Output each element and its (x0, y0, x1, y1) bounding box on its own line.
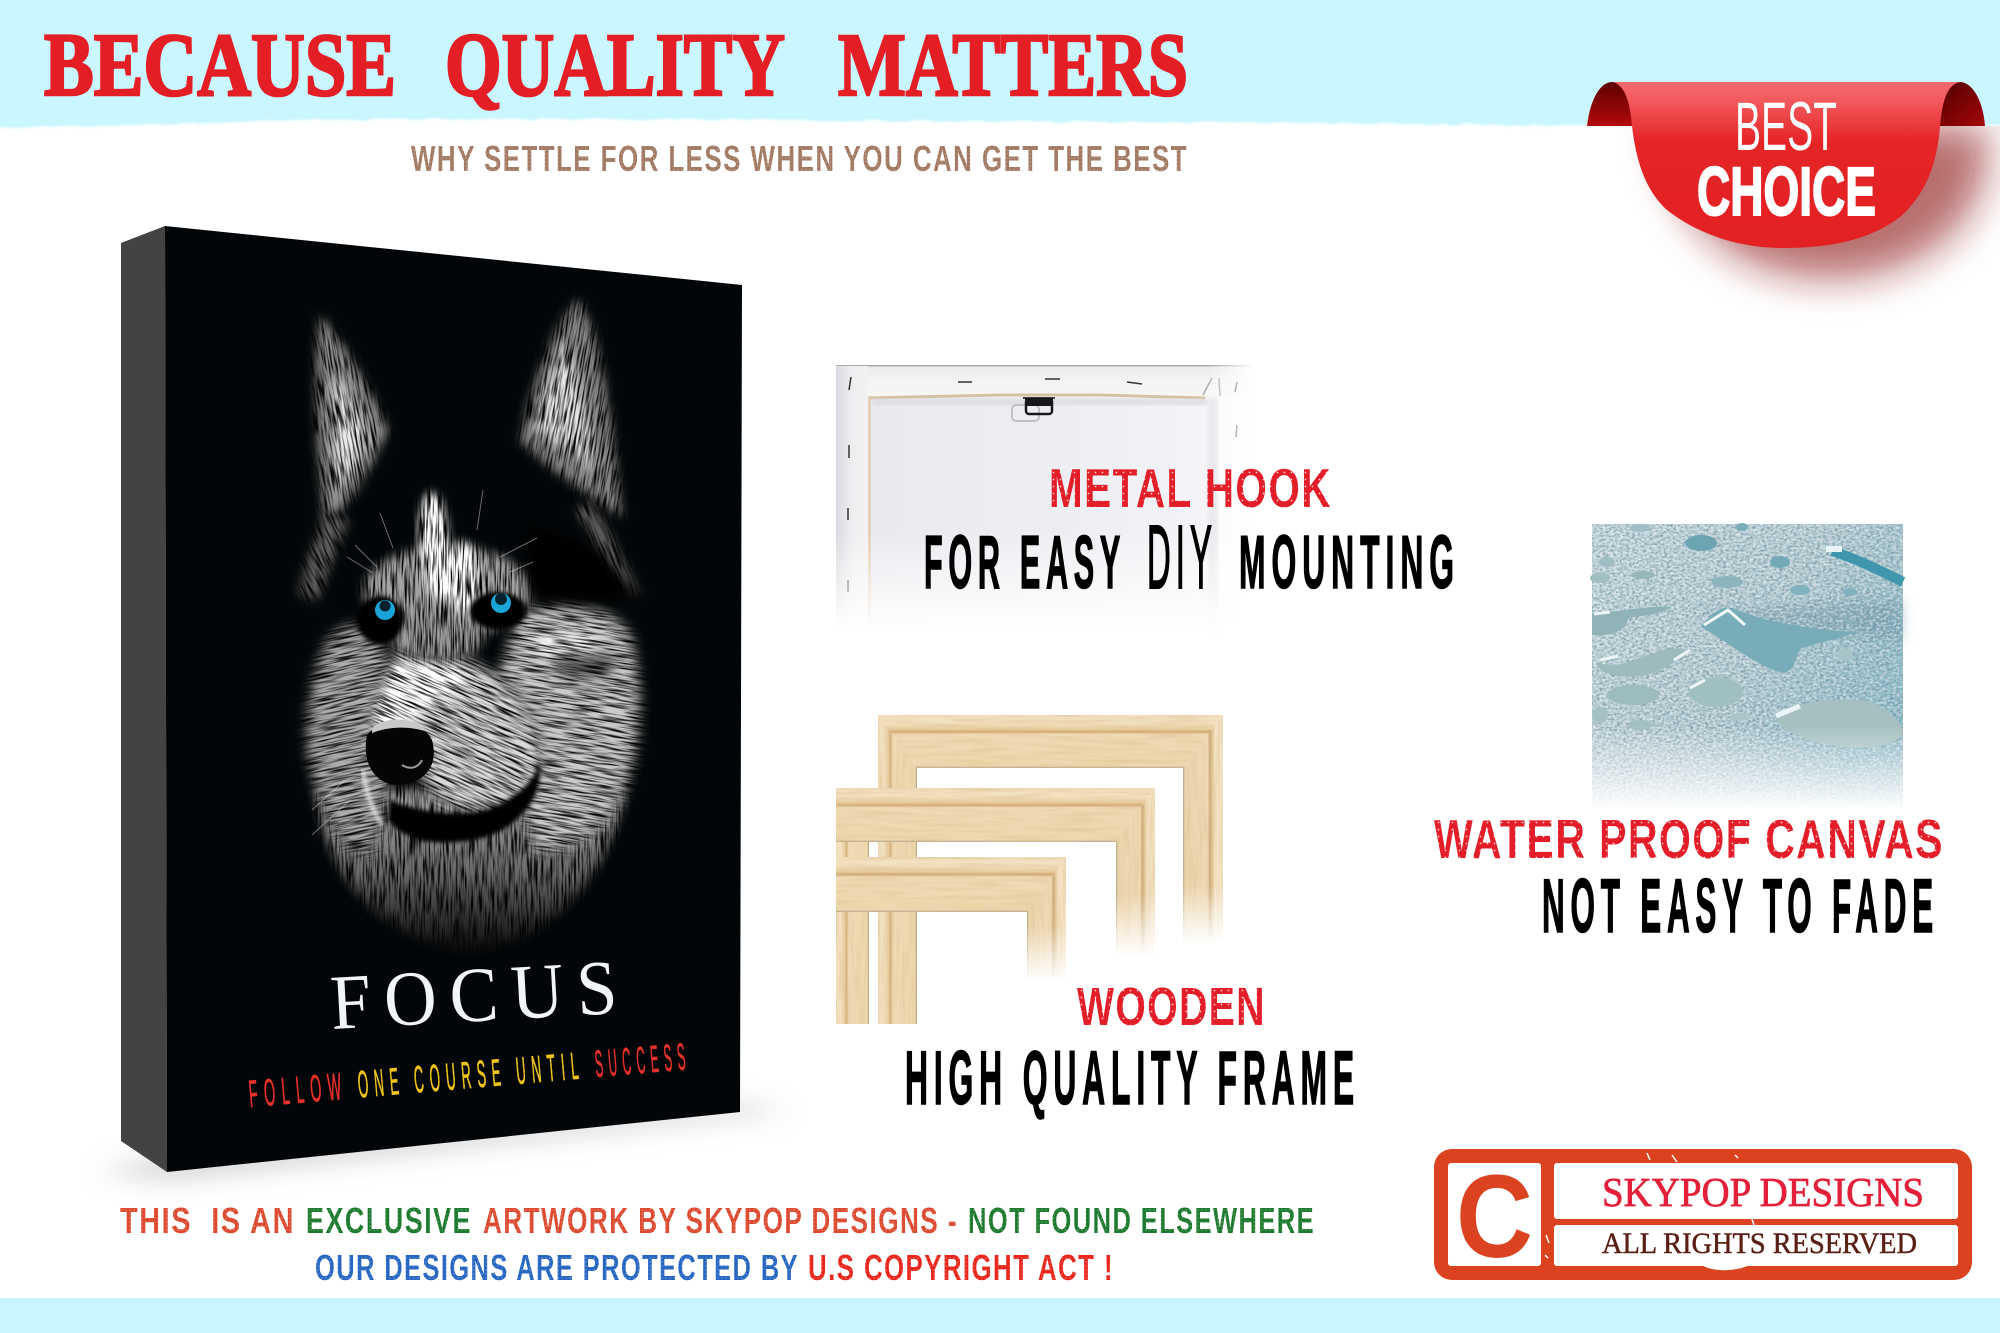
title: MATTERS (838, 16, 1188, 115)
wooden frames photo (836, 715, 1227, 1024)
mouth (363, 758, 540, 843)
text: HIGH QUALITY FRAME (905, 1036, 1360, 1121)
subtitle: WHY SETTLE FOR LESS WHEN YOU CAN GET THE BEST (411, 138, 1188, 179)
title: QUALITY (445, 16, 785, 115)
ribbon body (1612, 82, 1960, 248)
white blaze (419, 493, 479, 614)
metal hook (1012, 397, 1055, 421)
stamp letter c: C (1456, 1151, 1533, 1283)
frame middle (836, 788, 1159, 1024)
whiskers (312, 490, 540, 835)
dark dye band (1690, 600, 1903, 640)
water proof photo (1588, 523, 1908, 810)
water texture (1592, 524, 1903, 808)
hook sublabel: DIY (1147, 508, 1217, 608)
hook canvas back (836, 365, 1253, 629)
ribbon left curl (1587, 82, 1636, 126)
stamp rights: ALL RIGHTS RESERVED (1602, 1227, 1917, 1260)
stamp frame (1434, 1149, 1972, 1280)
canvas product: SUCCESS (593, 1036, 692, 1086)
hook photo (830, 360, 1260, 632)
muzzle (364, 647, 552, 814)
focus word: FOCUS (328, 942, 632, 1046)
water photo fade (1588, 725, 1908, 810)
top cyan band (0, 0, 2000, 127)
copyright stamp (1434, 1149, 1972, 1283)
canvas product: ONE COURSE UNTIL (356, 1045, 586, 1106)
exclusivity notice line 1: ARTWORK BY SKYPOP DESIGNS - (483, 1200, 958, 1241)
exclusivity notice line 2: U.S COPYRIGHT ACT ! (808, 1247, 1114, 1288)
left eye (375, 600, 395, 620)
hook sublabel: FOR EASY (924, 520, 1126, 604)
canvas front (165, 226, 742, 1172)
canvas product: FOLLOW (247, 1066, 349, 1116)
hook label: METAL HOOK (1049, 457, 1332, 519)
nose (366, 719, 434, 785)
exclusivity notice line 2: OUR DESIGNS ARE PROTECTED BY (315, 1247, 799, 1288)
water drops (1590, 523, 1903, 747)
ribbon shadow (1660, 126, 1989, 278)
right ear (514, 296, 628, 522)
left ruff (298, 616, 397, 864)
floor shadow (95, 1104, 790, 1180)
faint head side fur (294, 505, 354, 604)
stamp text box top (1554, 1163, 1958, 1219)
stamp distress (1545, 1153, 1754, 1270)
exclusivity notice line 1: THIS IS AN (120, 1200, 295, 1241)
badge text: best: BEST (1735, 88, 1837, 165)
canvas product (95, 226, 790, 1180)
canvas side (121, 226, 167, 1172)
exclusivity notice line 1 (120, 1200, 1315, 1241)
title: BECAUSE (44, 16, 396, 115)
dark mask patch (522, 548, 637, 608)
right ruff (492, 598, 649, 861)
hook canvas right fold (1218, 398, 1253, 629)
stamp text box bottom (1554, 1225, 1958, 1266)
stamp name: SKYPOP DESIGNS (1602, 1169, 1924, 1215)
exclusivity notice line 1: EXCLUSIVE (306, 1200, 472, 1241)
badge text: choice: CHOICE (1697, 153, 1876, 230)
brow and nose bridge (363, 546, 531, 662)
frame back (878, 715, 1227, 1024)
water base (1592, 524, 1903, 808)
wooden label: WOODEN (1077, 977, 1266, 1037)
best choice ribbon badge (1587, 82, 1989, 278)
frame front (836, 857, 1070, 1024)
tan wood edge (870, 395, 1205, 398)
ribbon right curl (1936, 82, 1985, 126)
hook canvas top fold (836, 365, 1253, 397)
dark eye sockets (357, 596, 403, 644)
exclusivity notice line 1: NOT FOUND ELSEWHERE (968, 1200, 1315, 1241)
bottom cyan band (0, 1298, 2000, 1333)
text: MOUNTING (1239, 520, 1460, 604)
hook canvas left fold (836, 366, 868, 629)
stamp c box (1448, 1163, 1541, 1266)
title (44, 16, 1188, 115)
left ear (308, 312, 392, 521)
right eye (491, 593, 511, 613)
hook photo fade (830, 530, 1260, 630)
lower neck fur (316, 790, 625, 950)
staples (848, 377, 1237, 592)
husky portrait (259, 283, 677, 950)
